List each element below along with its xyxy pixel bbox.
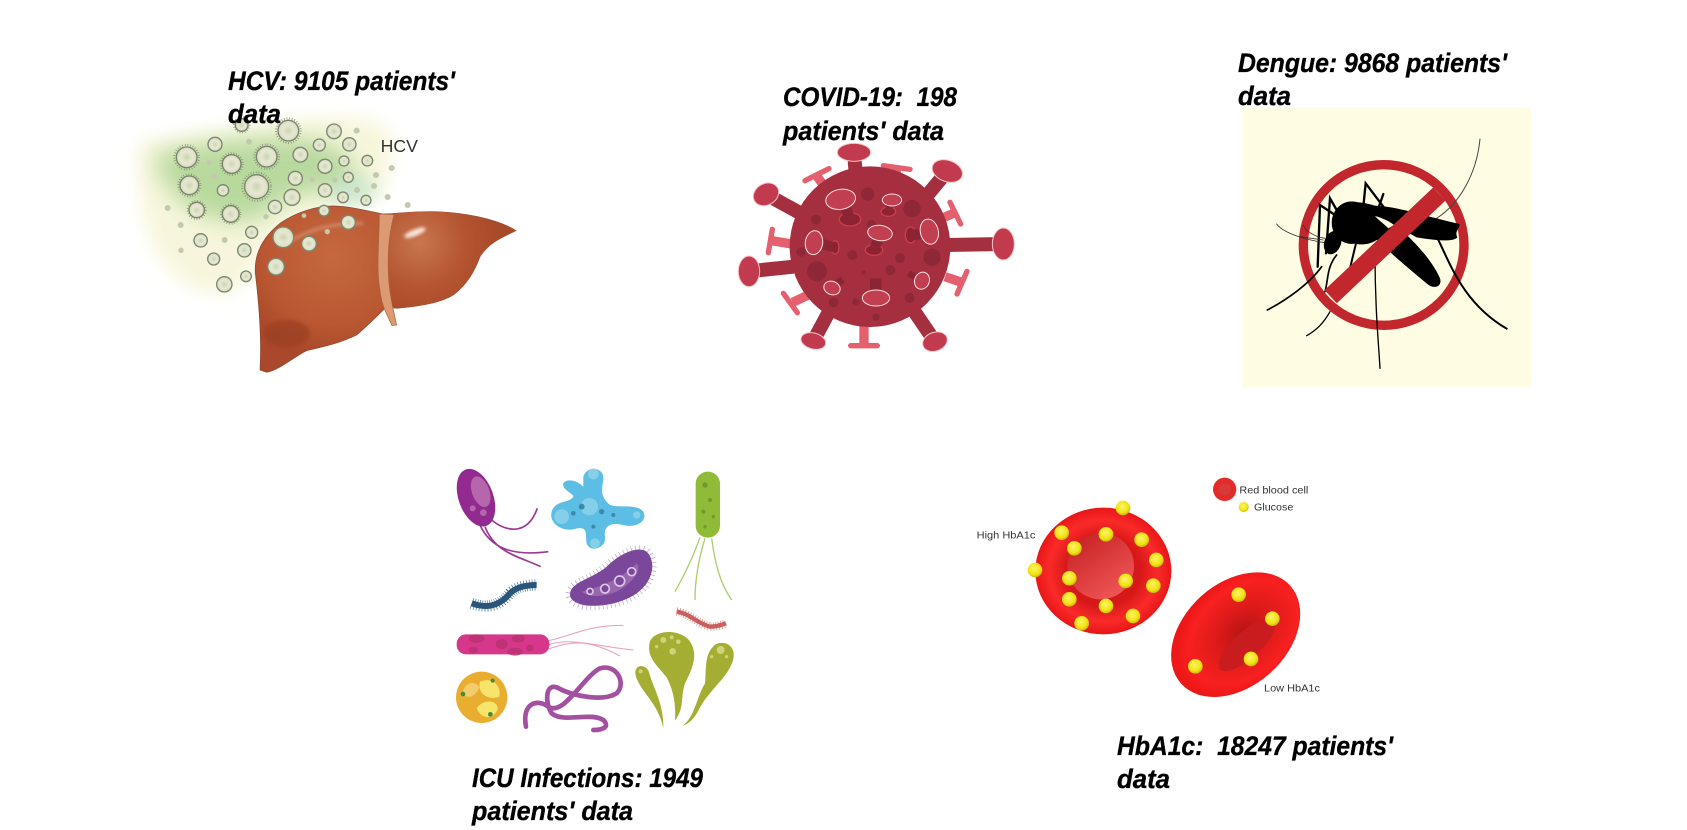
legend — [1213, 478, 1308, 514]
heading: COVID-19: patients' data — [782, 116, 944, 146]
prohibition slash — [1331, 194, 1439, 297]
green rod bacterium — [675, 472, 732, 600]
HCV label: HCV — [381, 136, 418, 156]
panel: COVID-19 virus illustration — [738, 143, 1014, 355]
panel: HbA1c red blood cells illustration — [977, 478, 1325, 722]
pink rod bacterium — [457, 625, 633, 656]
panel: HCV liver illustration — [139, 117, 516, 372]
heading: COVID-19 — [782, 82, 957, 146]
pale streak under the wing — [1375, 216, 1394, 228]
viruses outside liver — [165, 117, 411, 292]
virus body — [790, 166, 950, 327]
heading: ICU Infections: ICU Infections: 1949 — [472, 763, 703, 793]
salmon worm — [677, 612, 726, 627]
high HbA1c cell — [1035, 508, 1171, 634]
panel: ICU infections microbes illustration — [449, 464, 734, 730]
heading: Dengue: data — [1238, 81, 1291, 111]
yellow coccus — [456, 672, 507, 723]
heading: HbA1c: data — [1117, 764, 1170, 794]
liver — [255, 206, 516, 372]
heading: HCV: data — [228, 99, 281, 129]
prohibition ring — [1303, 165, 1464, 325]
mosquito silhouette — [1267, 139, 1507, 368]
heading: Dengue — [1238, 48, 1508, 111]
heading: Dengue: Dengue: 9868 patients' — [1238, 48, 1508, 78]
short spikes — [768, 166, 967, 346]
purple squiggle — [525, 668, 621, 730]
legend: Red blood cell — [1239, 485, 1308, 496]
panel: Dengue mosquito illustration — [1243, 107, 1531, 388]
high label: High HbA1c — [977, 530, 1035, 541]
heading: HbA1c — [1117, 731, 1394, 794]
heading: COVID-19: COVID-19: 198 — [783, 82, 957, 112]
legend: Glucose — [1254, 503, 1294, 514]
purple flagellate — [449, 464, 548, 567]
green haze background — [139, 117, 391, 293]
heading: HbA1c: HbA1c: 18247 patients' — [1117, 731, 1394, 761]
pale yellow background — [1243, 107, 1531, 388]
surface protein craters — [804, 187, 941, 306]
viruses on liver — [268, 205, 355, 275]
heading: HCV — [228, 66, 456, 129]
heading: ICU Infections: patients' data — [471, 796, 633, 826]
low label: Low HbA1c — [1264, 684, 1320, 695]
blue amoeba — [551, 469, 644, 549]
heading: ICU Infections — [471, 763, 703, 826]
long spikes — [738, 143, 1014, 355]
heading: HCV: HCV: 9105 patients' — [228, 66, 456, 96]
glucose dots — [1028, 501, 1280, 674]
blue worm — [472, 585, 537, 606]
green flask microbes — [635, 632, 734, 728]
surface spots — [796, 187, 941, 321]
purple bean bacterium — [570, 550, 652, 606]
low HbA1c cell — [1147, 547, 1325, 722]
